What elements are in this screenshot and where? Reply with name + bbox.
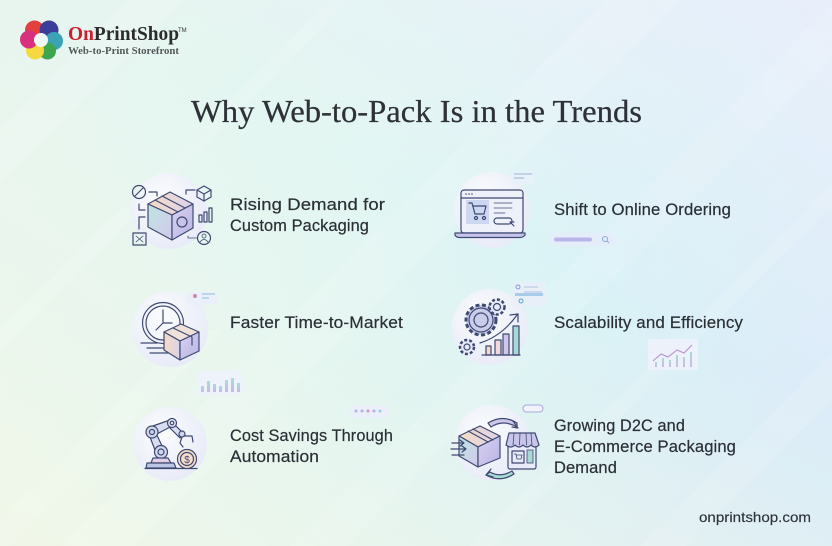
logo mark: colour petals <box>20 20 63 60</box>
search bar card <box>550 233 615 246</box>
item: Growing D2C and E-Commerce Packaging Demand: Demand <box>554 459 617 477</box>
label: Faster Time-to-Market <box>230 314 403 332</box>
mini chart card <box>197 371 242 395</box>
icon: packaging box with connected symbols <box>131 173 212 249</box>
label: Shift to Online Ordering <box>554 201 731 219</box>
label: Scalability and Efficiency <box>554 314 744 332</box>
item: Growing D2C and E-Commerce Packaging Demand <box>451 405 736 481</box>
logo tagline: Web-to-Print Storefront <box>68 46 180 57</box>
mini line chart card <box>648 339 698 370</box>
item: Shift to Online Ordering <box>454 171 731 248</box>
item: Rising Demand for Custom Packaging: Custom Packaging <box>230 217 369 235</box>
icon: clock with package <box>132 291 218 367</box>
logo wordmark: OnPrintShop <box>68 24 179 45</box>
title: Why Web-to-Pack Is in the Trends <box>191 93 642 129</box>
label: Cost Savings Through <box>230 427 393 445</box>
logo: OnPrintShop <box>20 20 187 60</box>
item: Growing D2C and E-Commerce Packaging Demand: E-Commerce Packaging <box>554 438 736 456</box>
label: Growing D2C and <box>554 417 685 435</box>
item: Cost Savings Through Automation <box>133 405 393 481</box>
item: Cost Savings Through Automation: Automation <box>230 448 319 466</box>
logo trademark: TM <box>178 28 187 34</box>
label: Rising Demand for <box>230 196 385 214</box>
icon: gears with growth chart <box>452 282 546 365</box>
item: Rising Demand for Custom Packaging <box>131 173 385 249</box>
icon: laptop with shopping cart <box>454 171 534 248</box>
icon: box and storefront with arrows <box>451 405 543 481</box>
icon: robot arm with dollar coin <box>133 407 207 481</box>
mini dots card <box>350 405 389 418</box>
item: Faster Time-to-Market <box>132 291 403 395</box>
item: Scalability and Efficiency <box>452 282 744 370</box>
icon: robot arm with dollar coin: $ <box>184 455 190 466</box>
website url: onprintshop.com <box>699 509 811 525</box>
